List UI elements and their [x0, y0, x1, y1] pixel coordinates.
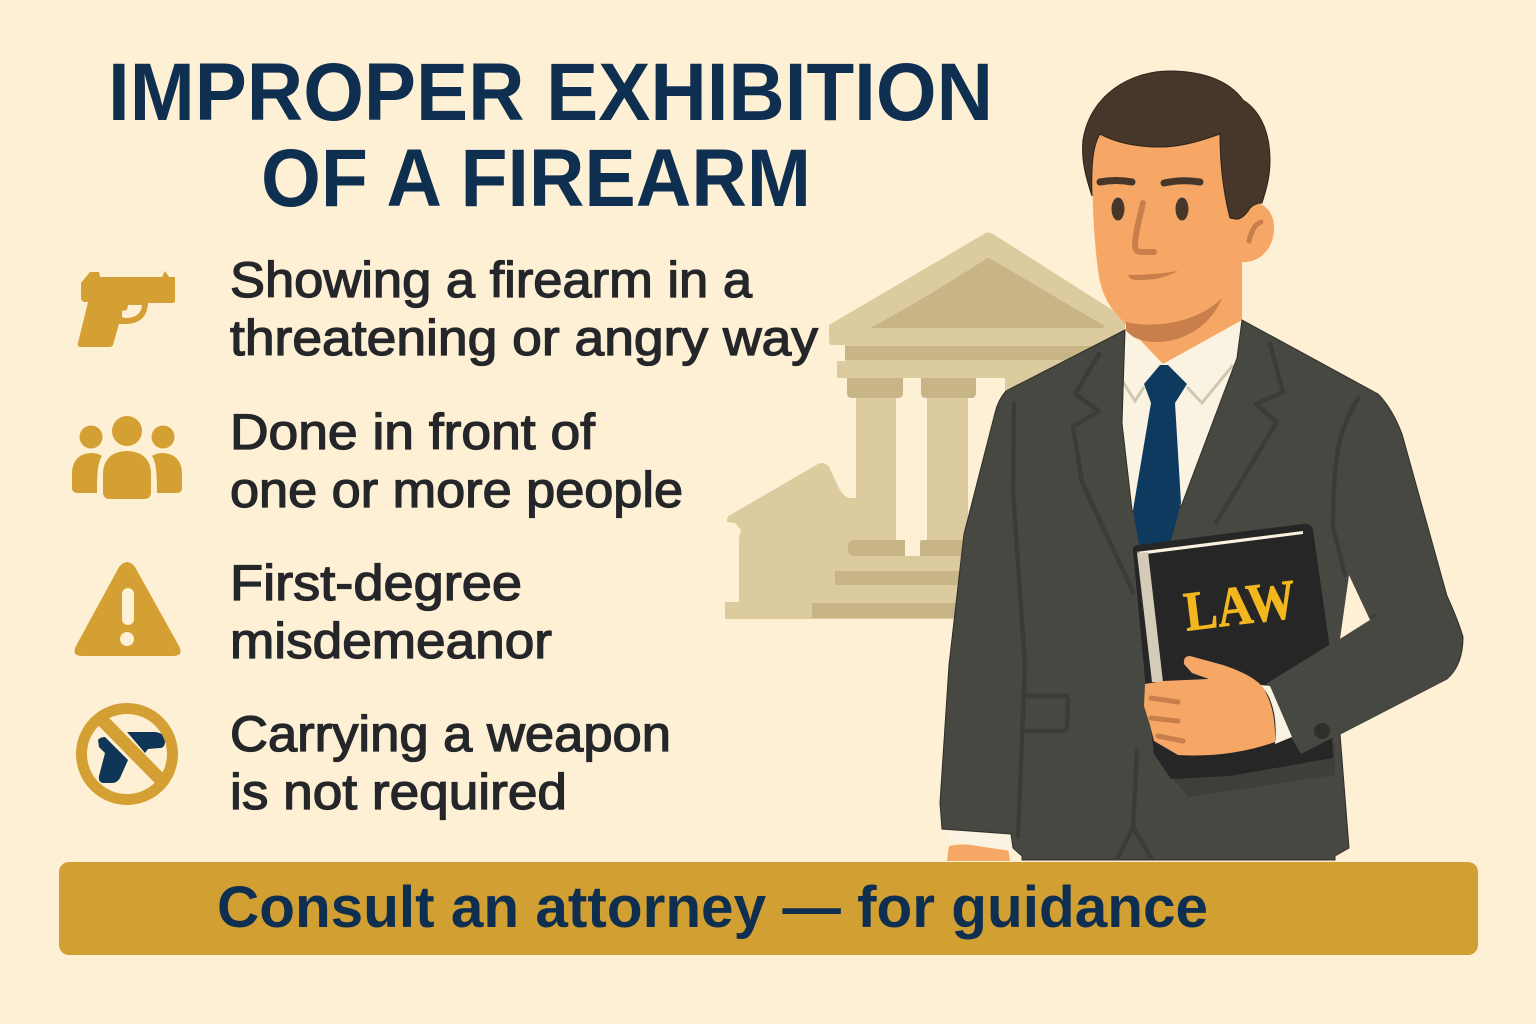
text: done in front of: Done in front of [230, 404, 595, 460]
text: showing a firearm [230, 252, 818, 366]
text: showing a firearm: Showing a firearm in a [230, 252, 752, 308]
law book [1133, 524, 1333, 779]
banner [59, 862, 1478, 955]
title [108, 47, 993, 224]
tie [1133, 365, 1187, 545]
jacket fold lines [1013, 344, 1399, 858]
title: IMPROPER EXHIBITION [108, 47, 993, 138]
ear [1240, 202, 1274, 262]
text: first-degree misdemeanor [230, 555, 552, 669]
book shadow on jacket [1165, 745, 1335, 797]
eyebrows, eyes, nose, mouth [1100, 180, 1222, 342]
holding hand [1144, 656, 1275, 755]
right cuff [1261, 685, 1292, 744]
face and neck [1092, 100, 1242, 364]
banner: Consult an attorney — for guidance [217, 875, 1208, 940]
hair [1083, 71, 1270, 219]
left cuff and hand [944, 826, 1012, 861]
shirt [1122, 322, 1241, 545]
jacket [940, 320, 1463, 860]
lawyer figure [940, 71, 1463, 861]
text: first-degree misdemeanor: misdemeanor [230, 613, 552, 669]
sleeve [1266, 600, 1461, 754]
law book: LAW [1181, 568, 1299, 644]
icon: no weapon [82, 708, 172, 800]
title: OF A FIREARM [261, 133, 811, 224]
icon: warning triangle [74, 562, 181, 656]
text: carrying a weapon: is not required [230, 764, 567, 820]
collar line [1123, 365, 1233, 403]
text: showing a firearm: threatening or angry way [230, 310, 818, 366]
text: first-degree misdemeanor: First-degree [230, 555, 522, 611]
text: done in front of: one or more people [230, 462, 683, 518]
cream gap between arm and body [1340, 575, 1370, 639]
icon: handgun [78, 271, 175, 347]
text: carrying a weapon: Carrying a weapon [230, 706, 671, 762]
text: carrying a weapon [230, 706, 671, 820]
cuff button [1314, 723, 1330, 739]
icon: group of people [72, 416, 182, 499]
text: done in front of [230, 404, 683, 518]
courthouse background [725, 232, 1125, 619]
